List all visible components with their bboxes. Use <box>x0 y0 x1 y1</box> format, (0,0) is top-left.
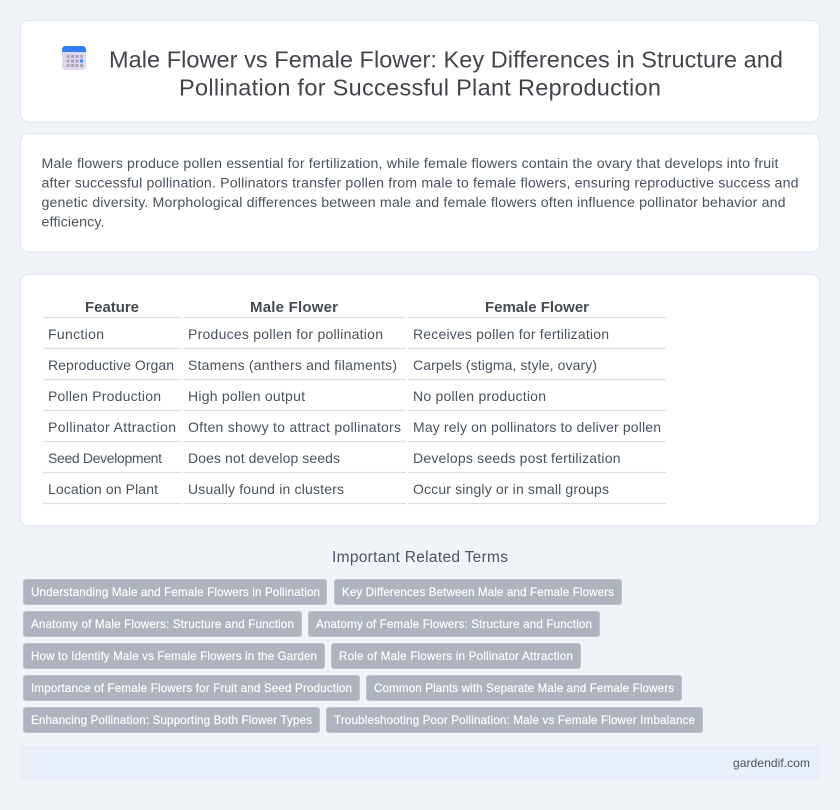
panel: comparison table <box>20 274 820 526</box>
text block: introduction <box>42 156 798 230</box>
tag: anatomy female: Anatomy of Female Flowers: Structure and Function <box>316 618 592 631</box>
tag: common plants <box>366 676 682 700</box>
heading: related terms: Important Related Terms <box>332 549 508 566</box>
tag: identify <box>24 644 324 668</box>
table row: location on plant: Usually found in clusters <box>188 481 344 497</box>
text block: introduction: Male flowers produce pollen essential for fertilization, while female flowers contain the ovary that develops into fruit <box>42 156 779 172</box>
table row: pollinator attraction <box>43 419 666 442</box>
tag: role of male flowers <box>332 644 580 668</box>
title: Pollination for Successful Plant Reproduction <box>179 74 661 100</box>
table row: reproductive organ: Carpels (stigma, style, ovary) <box>413 357 597 373</box>
title: Male Flower vs Female Flower: Key Differences in Structure and <box>109 46 783 72</box>
text block: introduction: efficiency. <box>42 214 104 230</box>
table row: pollinator attraction: Pollinator Attraction <box>48 419 176 435</box>
tag: troubleshooting: Troubleshooting Poor Pollination: Male vs Female Flower Imbalance <box>334 714 695 727</box>
table row: location on plant: Occur singly or in small groups <box>413 481 609 497</box>
table header row: Female Flower <box>485 299 589 316</box>
table row: seed development: Seed Development <box>48 450 162 466</box>
tag: enhancing pollination: Enhancing Pollination: Supporting Both Flower Types <box>31 714 312 727</box>
title <box>109 46 783 100</box>
text block: introduction: genetic diversity. Morphological differences between male and female flowers often influence pollinator behavior and <box>42 195 786 211</box>
table row: pollen production: Pollen Production <box>48 388 161 404</box>
table row: reproductive organ: Stamens (anthers and filaments) <box>188 357 397 373</box>
table row: pollen production: No pollen production <box>413 388 546 404</box>
table row: seed development: Does not develop seeds <box>188 450 340 466</box>
icon: calendar <box>62 46 86 70</box>
table row: reproductive organ: Reproductive Organ <box>48 357 174 373</box>
table row: pollen production <box>43 388 666 410</box>
table header row: Male Flower <box>250 299 338 316</box>
tag: anatomy male <box>24 612 302 636</box>
table header row <box>43 299 666 318</box>
tag: anatomy male: Anatomy of Male Flowers: Structure and Function <box>31 618 294 631</box>
table row: pollen production: High pollen output <box>188 388 305 404</box>
table header row: Feature <box>85 299 139 316</box>
table row: location on plant: Location on Plant <box>48 481 158 497</box>
tag: key differences <box>334 580 622 604</box>
tag: understanding: Understanding Male and Female Flowers in Pollination <box>31 586 320 599</box>
table row: reproductive organ <box>43 357 666 380</box>
panel: header <box>20 20 820 122</box>
table row: function: Produces pollen for pollination <box>188 326 383 342</box>
footer <box>20 746 820 780</box>
tag: importance of female flowers: Importance of Female Flowers for Fruit and Seed Production <box>31 682 352 695</box>
table row: function: Receives pollen for fertilization <box>413 326 609 342</box>
tag: troubleshooting <box>326 708 702 732</box>
text block: introduction: after successful pollination. Pollinators transfer pollen from male to female flowers, ensuring reproductive success and <box>42 176 798 192</box>
table row: pollinator attraction: Often showy to attract pollinators <box>188 419 401 435</box>
related term tags <box>24 580 702 732</box>
tag: common plants: Common Plants with Separate Male and Female Flowers <box>374 682 674 695</box>
panel: introduction <box>20 134 820 252</box>
table row: location on plant <box>43 481 666 504</box>
tag: importance of female flowers <box>24 676 360 700</box>
tag: anatomy female <box>308 612 600 636</box>
tag: key differences: Key Differences Between Male and Female Flowers <box>342 586 614 599</box>
table row: seed development: Develops seeds post fertilization <box>413 450 620 466</box>
table row: seed development <box>43 450 666 472</box>
table row: function <box>43 326 666 348</box>
table row: function: Function <box>48 326 104 342</box>
tag: role of male flowers: Role of Male Flowers in Pollinator Attraction <box>339 650 573 663</box>
tag: identify: How to Identify Male vs Female Flowers in the Garden <box>31 650 317 663</box>
tag: enhancing pollination <box>24 708 320 732</box>
footer source: gardendif.com <box>733 756 810 770</box>
table row: pollinator attraction: May rely on pollinators to deliver pollen <box>413 419 661 435</box>
tag: understanding <box>24 580 326 604</box>
